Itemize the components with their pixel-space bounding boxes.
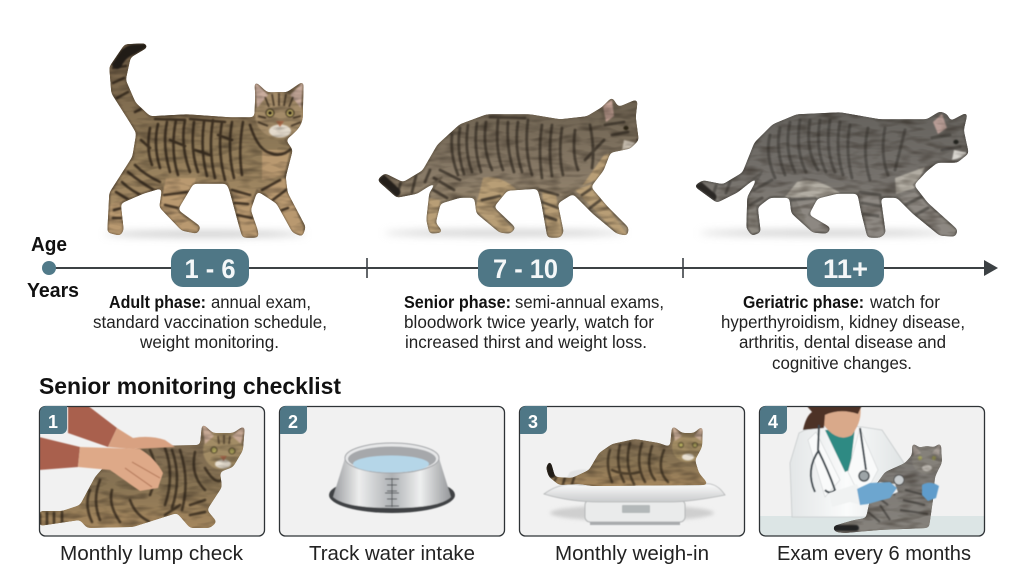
age pill: 7 - 10 bbox=[478, 249, 573, 287]
caption: track water intake: Track water intake bbox=[309, 543, 475, 565]
icon: water bowl bbox=[329, 443, 455, 513]
text block: geriatric phase: arthritis, dental disease and bbox=[739, 332, 946, 352]
text block: adult phase bbox=[93, 292, 327, 352]
panel 2: track water intake bbox=[280, 406, 504, 536]
cat illustration: adult cat, age 1-6 bbox=[105, 44, 305, 237]
text block: senior phase: increased thirst and weight loss. bbox=[405, 332, 647, 352]
age pill: 7 - 10: 7 - 10 bbox=[493, 254, 558, 284]
timeline axis with arrow bbox=[42, 258, 998, 278]
badge 3 bbox=[520, 406, 547, 434]
axis label: Age: Age bbox=[31, 234, 67, 256]
icon: gray cat on exam table bbox=[835, 442, 942, 533]
badge 2: 2 bbox=[288, 412, 298, 432]
text block: senior phase: bloodwork twice yearly, watch for bbox=[404, 312, 654, 332]
age pill: 11+ bbox=[807, 249, 884, 287]
panel 3: monthly weigh-in bbox=[520, 406, 744, 536]
badge 4 bbox=[760, 406, 787, 434]
caption: monthly lump check: Monthly lump check bbox=[60, 543, 244, 565]
adult cat head bbox=[255, 82, 303, 138]
text block: geriatric phase: watch for bbox=[869, 292, 940, 312]
age pill: 11+: 11+ bbox=[823, 254, 868, 284]
caption: exam every 6 months: Exam every 6 months bbox=[777, 543, 971, 565]
badge 1: 1 bbox=[48, 412, 58, 432]
cat illustration: senior cat, age 7-10 bbox=[378, 98, 640, 237]
text block: senior phase bbox=[404, 292, 664, 352]
heading: checklist: Senior monitoring checklist bbox=[39, 373, 341, 399]
text block: adult phase: annual exam, bbox=[211, 292, 311, 312]
text block: geriatric phase bbox=[721, 292, 965, 373]
icon: cat on scale bbox=[546, 425, 709, 486]
cat illustration: geriatric cat, age 11+ bbox=[695, 112, 970, 237]
caption: monthly weigh-in: Monthly weigh-in bbox=[555, 543, 709, 565]
axis label: Years: Years bbox=[27, 280, 79, 302]
panel 1: monthly lump check bbox=[39, 405, 264, 536]
text block: geriatric phase: cognitive changes. bbox=[772, 353, 912, 373]
age pill: 1 - 6 bbox=[171, 249, 249, 287]
text block: senior phase: semi-annual exams, bbox=[515, 292, 664, 312]
text block: adult phase: Adult phase: bbox=[109, 292, 206, 312]
text block: senior phase: Senior phase: bbox=[404, 292, 511, 312]
badge 2 bbox=[280, 406, 307, 434]
icon: veterinarian bbox=[790, 405, 904, 517]
icon: tabby cat being checked bbox=[39, 423, 245, 528]
badge 1 bbox=[40, 406, 67, 434]
age pill: 1 - 6: 1 - 6 bbox=[184, 254, 236, 284]
panel 4: exam every 6 months bbox=[760, 405, 985, 536]
text block: geriatric phase: Geriatric phase: bbox=[743, 292, 864, 312]
badge 4: 4 bbox=[768, 412, 778, 432]
text block: adult phase: weight monitoring. bbox=[139, 332, 279, 352]
icon: sleeves and hands bbox=[39, 405, 175, 491]
text block: geriatric phase: hyperthyroidism, kidney disease, bbox=[721, 312, 965, 332]
badge 3: 3 bbox=[528, 412, 538, 432]
text block: adult phase: standard vaccination schedule, bbox=[93, 312, 327, 332]
icon: scale bbox=[544, 470, 725, 525]
icon: blue gloves and stethoscope head bbox=[829, 475, 939, 507]
